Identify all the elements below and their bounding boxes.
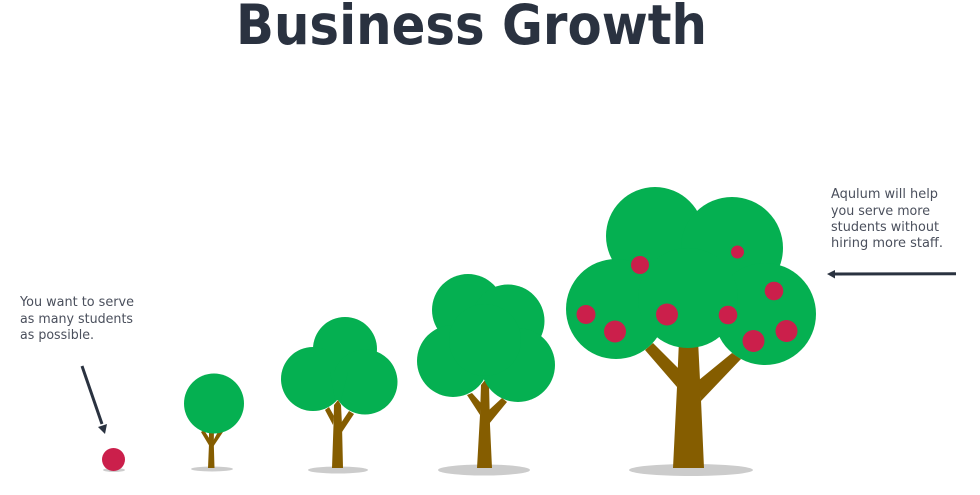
arrow: pointing left to fruit tree bbox=[827, 270, 956, 278]
trunk and branches bbox=[645, 340, 741, 468]
canopy bbox=[566, 187, 816, 365]
arrow: pointing down to seed bbox=[82, 366, 107, 434]
medium tree bbox=[281, 317, 398, 474]
text block: left callout bbox=[19, 294, 134, 343]
text block: right callout: students without bbox=[831, 219, 939, 235]
text block: right callout: hiring more staff. bbox=[831, 235, 943, 251]
fruit tree bbox=[566, 187, 816, 476]
text block: left callout: as many students bbox=[20, 311, 133, 327]
text block: left callout: You want to serve bbox=[19, 294, 134, 310]
text block: left callout: as possible. bbox=[20, 327, 94, 343]
text block: right callout: you serve more bbox=[831, 203, 930, 219]
text block: right callout: Aqulum will help bbox=[831, 186, 938, 202]
text block: right callout bbox=[831, 186, 943, 251]
tree shadow bbox=[629, 464, 753, 476]
fruits bbox=[576, 246, 798, 352]
small tree bbox=[184, 374, 244, 472]
seed with shadow bbox=[102, 448, 125, 472]
large tree bbox=[417, 274, 555, 476]
